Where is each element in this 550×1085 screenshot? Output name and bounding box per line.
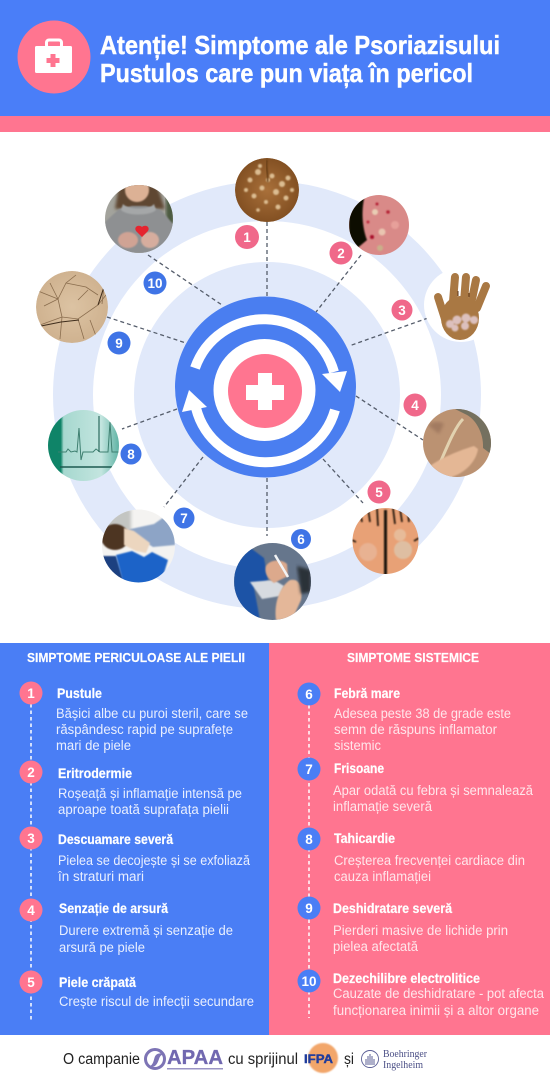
item 2: Roșeață și inflamație intensă pe bbox=[58, 786, 242, 801]
item 9 bbox=[333, 900, 508, 954]
item 3: Descuamare severă bbox=[58, 831, 173, 847]
timeline: 10 bbox=[301, 974, 317, 989]
circular symptom diagram bbox=[36, 158, 498, 620]
photo 7: sick person in blanket bbox=[101, 509, 175, 586]
item 8: cauza inflamației bbox=[334, 869, 431, 884]
item 5: Crește riscul de infecții secundare bbox=[59, 994, 254, 1009]
icon: first aid kit bbox=[18, 20, 90, 94]
number badges on diagram: 2 bbox=[337, 246, 345, 261]
background rings bbox=[73, 201, 461, 589]
item 7: Frisoane bbox=[334, 760, 384, 776]
header band bbox=[0, 0, 550, 132]
photo 5: cracked palms bbox=[352, 508, 419, 576]
item 5 bbox=[59, 974, 254, 1009]
item 7: inflamație severă bbox=[333, 799, 432, 814]
item 7 bbox=[333, 760, 533, 814]
number badges on diagram: 4 bbox=[411, 398, 419, 413]
number badges on diagram bbox=[108, 225, 426, 549]
panel heading: SIMPTOME SISTEMICE bbox=[347, 650, 479, 665]
item 6: Febră mare bbox=[334, 685, 400, 701]
logo: Boehringer Ingelheim: Boehringer bbox=[383, 1049, 427, 1060]
item 1: Bășici albe cu puroi steril, care se bbox=[56, 706, 248, 721]
item 8 bbox=[334, 830, 525, 884]
footer: campaign sponsors bbox=[63, 1043, 427, 1073]
item 10: Cauzate de deshidratare - pot afecta bbox=[333, 986, 544, 1001]
item 10 bbox=[333, 970, 544, 1018]
item 2 bbox=[58, 765, 242, 817]
item 6: Adesea peste 38 de grade este bbox=[334, 706, 511, 721]
item 1: răspândesc rapid pe suprafețe bbox=[56, 722, 233, 737]
item 6: sistemic bbox=[334, 738, 381, 753]
footer text bbox=[63, 1051, 354, 1068]
logo: Boehringer Ingelheim: Ingelheim bbox=[383, 1060, 423, 1071]
item 4: Durere extremă și senzație de bbox=[59, 923, 233, 938]
photo 4: skin with burning sensation bbox=[423, 409, 491, 478]
number badges on diagram: 10 bbox=[147, 276, 163, 291]
number badges on diagram: 3 bbox=[398, 303, 406, 318]
logo: IFPA: IFPA bbox=[304, 1054, 333, 1066]
timeline: 5 bbox=[27, 975, 35, 990]
photo 10: woman holding a heart bbox=[105, 185, 173, 253]
number badges on diagram: 6 bbox=[297, 532, 305, 547]
number badges on diagram: 9 bbox=[115, 336, 123, 351]
panel: systemic symptoms bbox=[269, 643, 550, 1035]
timeline: 1 bbox=[27, 686, 35, 701]
photo 1: pustules on skin bbox=[235, 158, 299, 222]
item 1 bbox=[56, 685, 248, 753]
footer text: cu sprijinul bbox=[228, 1051, 298, 1068]
timeline: 9 bbox=[305, 901, 313, 916]
panel heading: SIMPTOME PERICULOASE ALE PIELII bbox=[27, 650, 245, 665]
connector lines bbox=[107, 222, 428, 536]
item 5: Piele crăpată bbox=[59, 974, 136, 990]
central icon: cycle and cross bbox=[175, 296, 356, 478]
logo: IFPA bbox=[304, 1043, 338, 1073]
timeline: 3 bbox=[27, 831, 35, 846]
item 10: Dezechilibre electrolitice bbox=[333, 970, 480, 986]
item 2: Eritrodermie bbox=[58, 765, 132, 781]
item 9: Pierderi masive de lichide prin bbox=[333, 923, 508, 938]
timeline: 6 bbox=[305, 687, 313, 702]
item 3 bbox=[57, 831, 250, 884]
photo 8: ECG paper bbox=[48, 410, 122, 481]
timeline: 7 bbox=[305, 762, 313, 777]
item 7: Apar odată cu febra și semnalează bbox=[333, 783, 533, 798]
number badges on diagram: 5 bbox=[375, 485, 383, 500]
item 4: arsură pe piele bbox=[59, 940, 145, 955]
item 4: Senzație de arsură bbox=[59, 900, 168, 916]
panel: dangerous skin symptoms bbox=[0, 643, 269, 1035]
item 1: Pustule bbox=[57, 685, 102, 701]
photo 3: hand with plaques bbox=[424, 268, 498, 342]
photo 6: person with thermometer bbox=[234, 543, 311, 620]
item 3: Pielea se decojește și se exfoliază bbox=[58, 853, 250, 868]
logo: Boehringer Ingelheim bbox=[362, 1049, 427, 1071]
item 8: Creșterea frecvenței cardiace din bbox=[334, 853, 525, 868]
title bbox=[100, 30, 500, 88]
item 10: funcționarea inimii și a altor organe bbox=[333, 1003, 539, 1018]
title: Pustulos care pun viața în pericol bbox=[100, 58, 473, 88]
timeline: 8 bbox=[305, 832, 313, 847]
footer text: O campanie bbox=[63, 1051, 140, 1068]
timeline bbox=[20, 682, 42, 1022]
number badges on diagram: 1 bbox=[243, 230, 251, 245]
item 2: aproape toată suprafața pielii bbox=[58, 802, 229, 817]
item 1: mari de piele bbox=[56, 738, 131, 753]
timeline: 4 bbox=[27, 903, 35, 918]
item 9: pielea afectată bbox=[333, 939, 418, 954]
logo: APAA bbox=[146, 1047, 223, 1070]
photo 2: erythroderma skin bbox=[349, 195, 409, 255]
number badges on diagram: 7 bbox=[180, 511, 188, 526]
item 6: semn de răspuns inflamator bbox=[334, 722, 497, 737]
item 6 bbox=[334, 685, 511, 753]
logo: APAA: APAA bbox=[167, 1047, 223, 1069]
title: Atenție! Simptome ale Psoriazisului bbox=[100, 30, 500, 60]
timeline bbox=[298, 682, 320, 1018]
number badges on diagram: 8 bbox=[127, 447, 135, 462]
item 9: Deshidratare severă bbox=[333, 900, 452, 916]
footer text: și bbox=[344, 1051, 354, 1068]
photo 9: cracked dry earth bbox=[36, 271, 108, 343]
item 8: Tahicardie bbox=[334, 830, 395, 846]
item 4 bbox=[59, 900, 233, 955]
item 3: în straturi mari bbox=[57, 869, 144, 884]
timeline: 2 bbox=[27, 765, 35, 780]
